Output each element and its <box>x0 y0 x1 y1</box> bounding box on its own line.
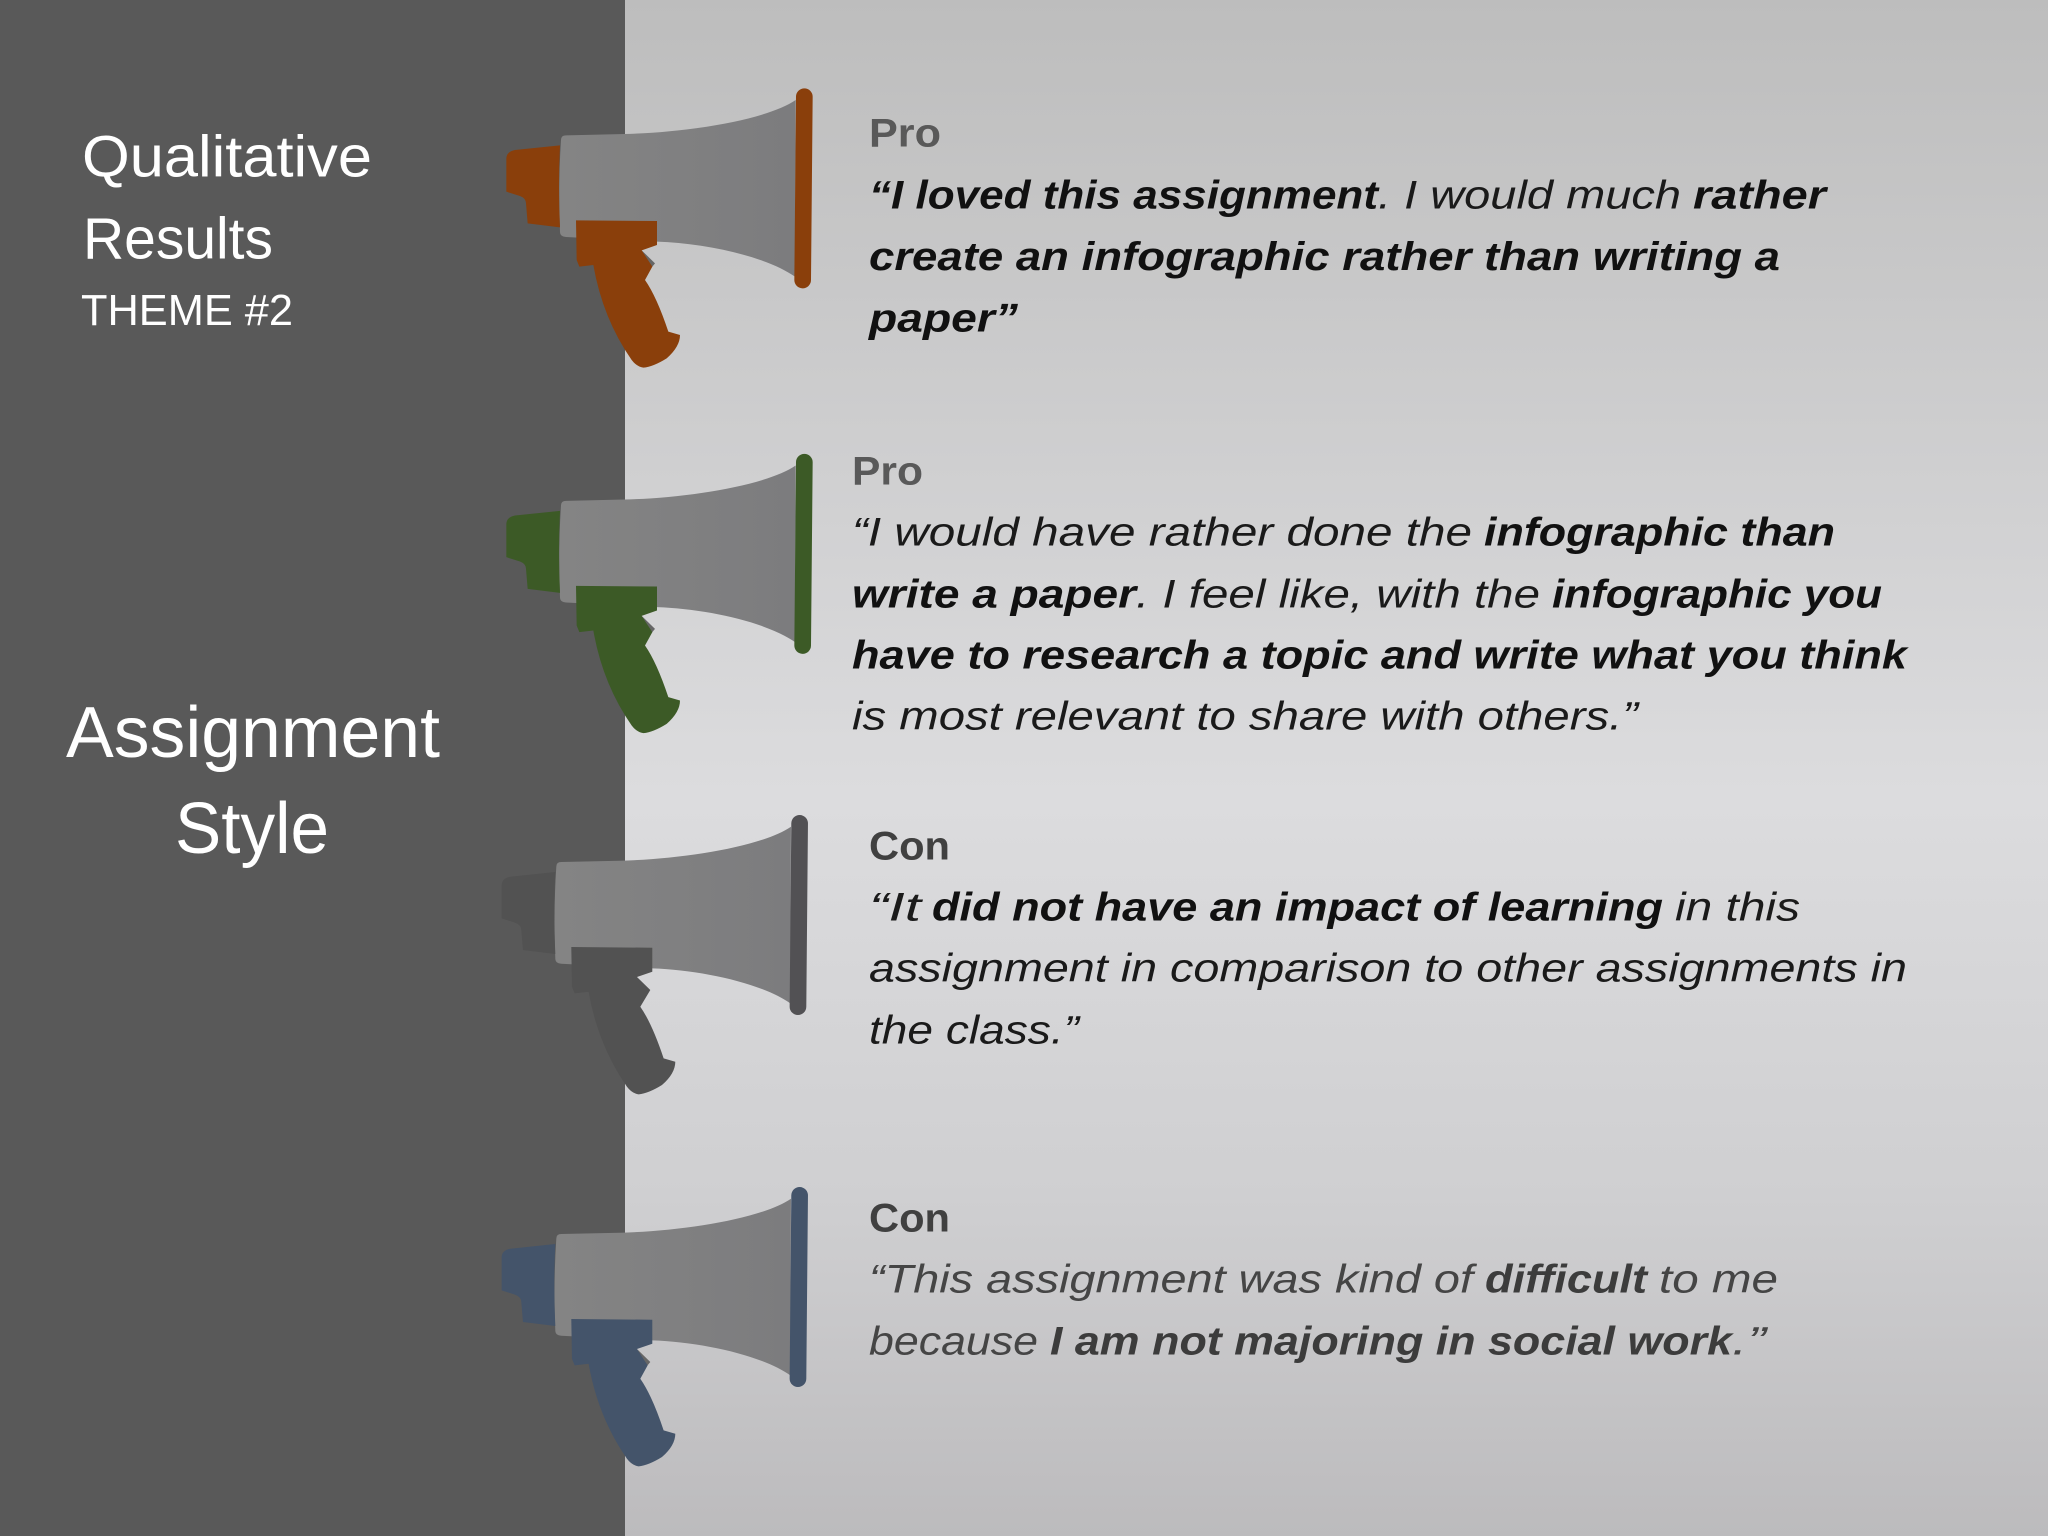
text block: pro quote 1: Pro <box>869 112 941 156</box>
text block: con quote 1: “It <box>869 886 924 930</box>
text block: con quote 1: the class.” <box>869 1008 1081 1052</box>
text block: con quote 2: to me <box>1659 1258 1778 1302</box>
heading: assignment style <box>66 693 440 869</box>
heading: qualitative results theme: THEME #2 <box>81 286 293 335</box>
text block: con quote 2: .” <box>1732 1320 1768 1364</box>
text block: pro quote 2: is most relevant to share with others.” <box>852 694 1640 738</box>
text block: pro quote 1: create an infographic rather than writing a <box>869 235 1780 279</box>
text block: pro quote 2: “I would have rather done the <box>852 510 1472 554</box>
text block: con quote 2: Con <box>869 1196 950 1240</box>
heading: qualitative results theme: Results <box>83 206 273 272</box>
heading: assignment style: Style <box>175 789 329 869</box>
text block: pro quote 2: write a paper <box>852 572 1139 616</box>
icon: charcoal megaphone <box>502 823 800 1094</box>
text block: pro quote 2: have to research a topic and write what you think <box>852 634 1909 678</box>
icon: green megaphone <box>506 462 804 733</box>
heading: qualitative results theme: Qualitative <box>82 124 372 190</box>
text block: pro quote 2: infographic than <box>1484 510 1835 554</box>
text block: con quote 2: because <box>869 1320 1038 1364</box>
text block: pro quote 1: rather <box>1693 174 1829 218</box>
text block: con quote 2: I am not majoring in social work <box>1050 1320 1734 1364</box>
text block: con quote 1 <box>869 824 1907 1052</box>
heading: qualitative results theme <box>81 124 372 335</box>
icon: orange megaphone <box>506 97 804 368</box>
text block: pro quote 1 <box>868 112 1829 340</box>
panel: left sidebar <box>0 0 625 1536</box>
text block: con quote 1: assignment in comparison to other assignments in <box>869 946 1907 990</box>
text block: pro quote 2: Pro <box>852 450 923 494</box>
text block: pro quote 1: . I would much <box>1378 174 1681 218</box>
text block: con quote 1: did not have an impact of learning <box>932 886 1663 930</box>
text block: con quote 1: Con <box>869 824 950 868</box>
text block: pro quote 1: “I loved this assignment <box>869 174 1380 218</box>
text block: pro quote 2: . I feel like, with the <box>1136 572 1540 616</box>
text block: pro quote 1: paper” <box>868 296 1018 340</box>
text block: con quote 2 <box>869 1196 1778 1364</box>
heading: assignment style: Assignment <box>66 693 440 773</box>
text block: pro quote 2: infographic you <box>1552 572 1882 616</box>
text block: pro quote 2 <box>852 450 1909 738</box>
text block: con quote 2: “This assignment was kind of <box>869 1258 1478 1302</box>
text block: con quote 2: difficult <box>1485 1258 1649 1302</box>
text block: con quote 1: in this <box>1675 886 1800 930</box>
icon: blue megaphone <box>502 1195 800 1466</box>
